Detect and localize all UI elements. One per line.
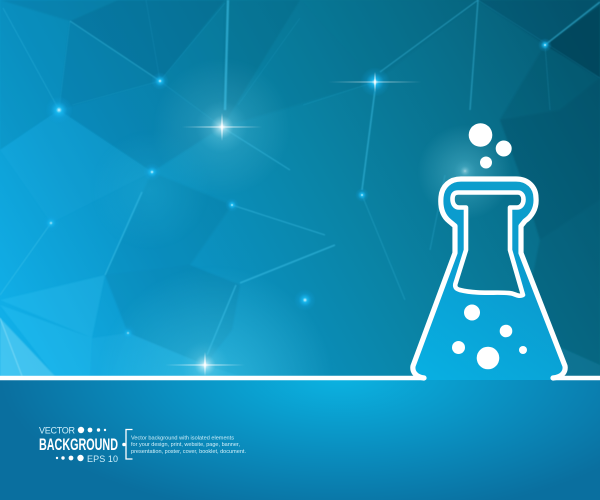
light rays along mesh edges xyxy=(0,0,600,376)
icon: conical flask xyxy=(0,123,600,380)
description text: presentation, poster, cover, booklet, document. xyxy=(131,449,246,455)
baseline right xyxy=(552,376,600,380)
label: eps 10: EPS 10 xyxy=(87,454,118,464)
bottom panel xyxy=(0,379,600,500)
baseline left xyxy=(0,376,424,380)
flask body fill xyxy=(413,179,565,380)
glowing light nodes xyxy=(42,38,552,389)
bracket xyxy=(122,430,132,459)
flask outer outline xyxy=(413,179,565,378)
bubbles inside flask xyxy=(452,304,527,369)
description text xyxy=(131,436,246,455)
description text: Vector background with isolated elements xyxy=(131,436,234,442)
rising bubbles xyxy=(469,123,512,168)
flask inner outline xyxy=(452,192,524,296)
label: background: BACKGROUND xyxy=(39,436,118,454)
description text: for your design, print, website, page, banner, xyxy=(131,442,240,448)
logo: vector background eps 10 xyxy=(39,426,118,464)
background: low-poly mesh xyxy=(0,0,600,382)
label: vector: VECTOR xyxy=(39,426,76,436)
